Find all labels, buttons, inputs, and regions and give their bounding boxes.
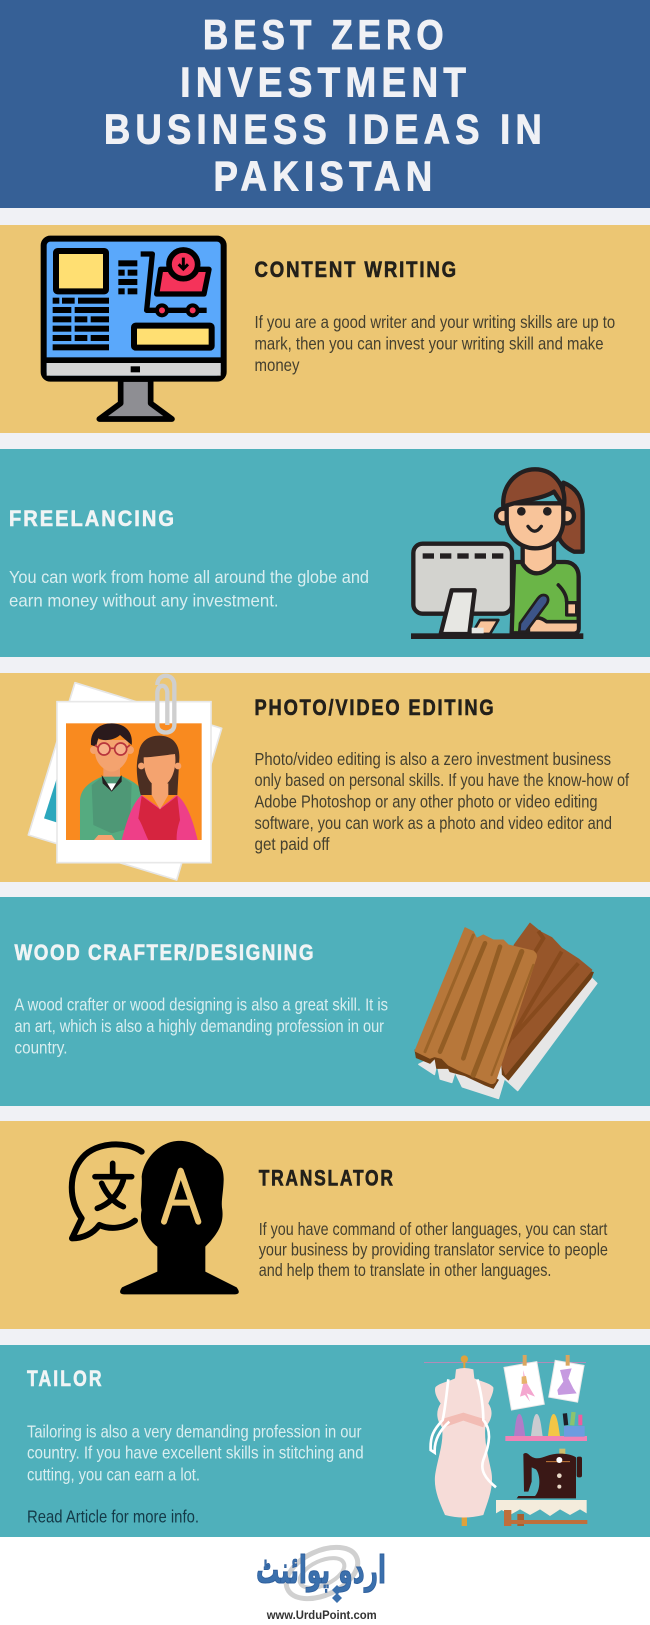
text: tailor body: cutting, you can earn a lot. xyxy=(27,1465,200,1485)
heading: tailor: TAILOR xyxy=(27,1366,104,1391)
icon: woman at computer xyxy=(411,469,583,639)
logo url: www.UrduPoint.com xyxy=(266,1610,377,1622)
text: freelancing body xyxy=(9,567,369,611)
text: photo/video editing body: get paid off xyxy=(254,834,330,854)
logo Urdu wordmark: اردو پوائنٹ xyxy=(256,1548,386,1593)
heading: content writing: CONTENT WRITING xyxy=(254,257,458,282)
panel: freelancing xyxy=(0,449,650,657)
heading: wood crafter/designing: WOOD CRAFTER/DESIGNING xyxy=(14,940,315,965)
panel: photo/video editing xyxy=(0,673,650,882)
icon: computer monitor with shopping cart xyxy=(44,239,224,419)
logo diamonds xyxy=(332,1585,342,1603)
text: content writing body: money xyxy=(254,355,300,375)
title: PAKISTAN xyxy=(214,153,438,200)
panel: content writing xyxy=(0,225,650,433)
icon: wooden planks xyxy=(415,923,597,1098)
text: freelancing body: You can work from home all around the globe and xyxy=(9,567,369,587)
text: read article note: Read Article for more info. xyxy=(27,1507,199,1527)
title: BEST ZERO xyxy=(203,11,449,58)
title: INVESTMENT xyxy=(180,59,471,106)
title xyxy=(104,11,547,200)
panel: wood crafter/designing xyxy=(0,897,650,1106)
text: wood crafter body: an art, which is also a highly demanding profession in our xyxy=(14,1016,384,1036)
text: content writing body xyxy=(254,312,615,375)
panel: translator xyxy=(0,1121,650,1329)
text: translator body: and help them to translate in other languages. xyxy=(259,1260,551,1280)
header banner xyxy=(0,0,650,208)
logo: UrduPoint xyxy=(256,1537,386,1622)
icon: translator head and speech bubble xyxy=(72,1141,239,1294)
logo swirl xyxy=(278,1537,366,1609)
icon: tailoring scene xyxy=(424,1355,587,1526)
text: translator body xyxy=(259,1219,608,1280)
text: wood crafter body: A wood crafter or wood designing is also a great skill. It is xyxy=(14,995,388,1015)
text: wood crafter body: country. xyxy=(14,1037,68,1057)
heading: translator: TRANSLATOR xyxy=(259,1165,395,1190)
text: wood crafter body xyxy=(14,995,388,1057)
panel: tailor xyxy=(0,1345,650,1537)
heading: photo/video editing: PHOTO/VIDEO EDITING xyxy=(254,695,496,720)
text: tailor body xyxy=(27,1421,364,1485)
text: tailor body: Tailoring is also a very demanding profession in our xyxy=(27,1421,362,1441)
text: tailor body: country. If you have excellent skills in stitching and xyxy=(27,1443,364,1463)
title: BUSINESS IDEAS IN xyxy=(104,105,547,152)
text: freelancing body: earn money without any investment. xyxy=(9,591,279,611)
text: photo/video editing body xyxy=(254,749,629,854)
woman xyxy=(137,736,179,795)
man xyxy=(80,776,142,840)
heading: freelancing: FREELANCING xyxy=(9,506,176,531)
icon: pinned polaroid photos xyxy=(28,676,222,880)
